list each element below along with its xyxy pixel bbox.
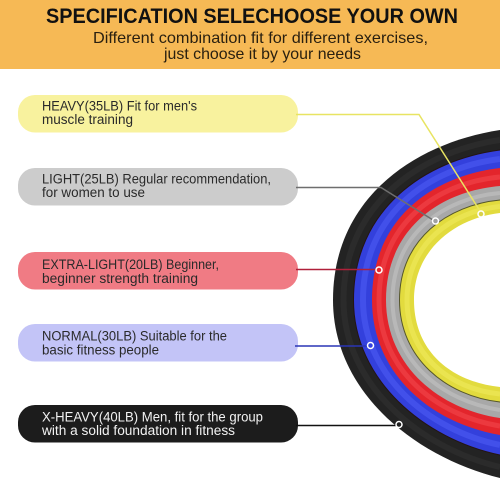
- pill: light: LIGHT(25LB) Regular recommendation,: [42, 171, 271, 186]
- pill: x-heavy: [18, 405, 298, 442]
- pill: extra-light: beginner strength training: [42, 271, 198, 286]
- pill: light: for women to use: [42, 185, 145, 200]
- pill: extra-light: [18, 252, 298, 290]
- leader line: x-heavy: [296, 422, 402, 428]
- pill: x-heavy: X-HEAVY(40LB) Men, fit for the group: [42, 410, 263, 425]
- subtitle: [93, 30, 428, 63]
- pill: heavy: muscle training: [42, 112, 133, 127]
- band: light gray: [386, 185, 500, 420]
- pill: light: [18, 168, 298, 206]
- subtitle: just choose it by your needs: [163, 46, 361, 63]
- leader line: light: [296, 188, 438, 224]
- leader line: normal: [295, 342, 374, 348]
- pill: heavy: HEAVY(35LB) Fit for men's: [42, 98, 197, 114]
- pill: extra-light: EXTRA-LIGHT(20LB) Beginner,: [42, 257, 219, 272]
- subtitle: Different combination fit for different exercises,: [93, 30, 428, 47]
- coiled resistance bands: [333, 129, 500, 480]
- band: heavy yellow: [400, 199, 500, 404]
- header banner: [0, 0, 500, 69]
- pill: x-heavy: with a solid foundation in fitness: [41, 423, 235, 438]
- band: x-heavy black: [333, 129, 500, 480]
- pill: normal: [18, 324, 298, 362]
- title: SPECIFICATION SELECHOOSE YOUR OWN: [46, 5, 458, 28]
- leader line: extra-light: [296, 267, 382, 273]
- pill: normal: basic fitness people: [42, 342, 159, 357]
- band: normal blue: [354, 149, 500, 457]
- pill: heavy: [18, 95, 298, 132]
- band: extra-light red: [372, 167, 500, 437]
- leader line: heavy: [296, 114, 484, 217]
- pill: normal: NORMAL(30LB) Suitable for the: [42, 329, 227, 344]
